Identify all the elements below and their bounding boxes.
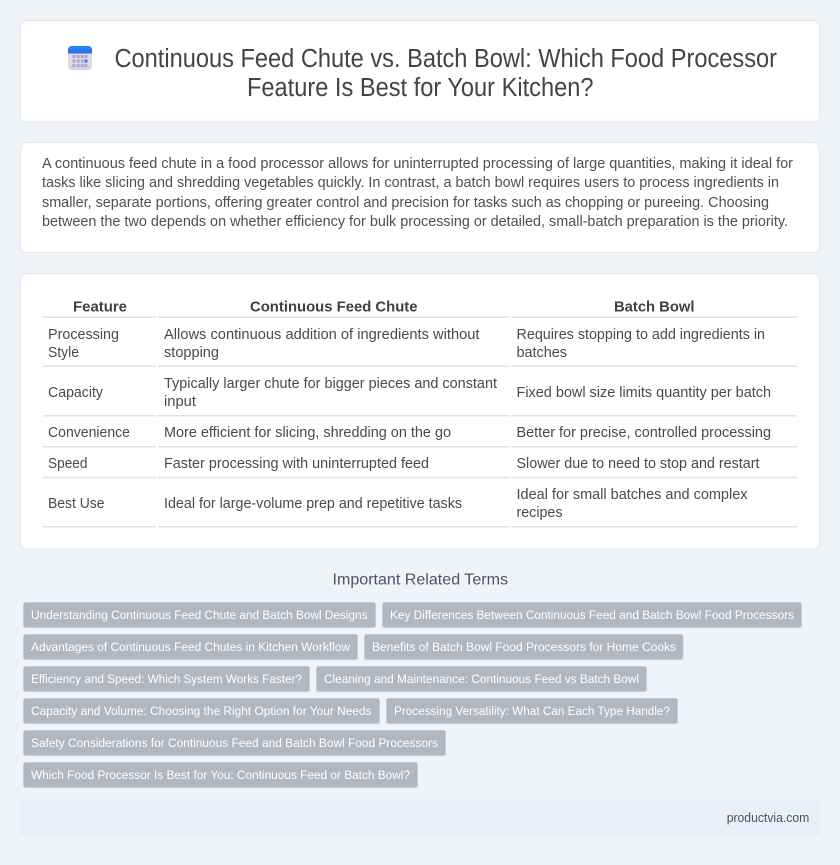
chip: cleaning: Cleaning and Maintenance: Continuous Feed vs Batch Bowl [324, 672, 639, 686]
intro text block: smaller, separate portions, offering greater control and precision for tasks such as chopping or pureeing. Choosing [42, 195, 769, 211]
table row: capacity: Fixed bowl size limits quantity per batch [516, 385, 771, 401]
table row: processing style: Allows continuous addition of ingredients without [164, 327, 480, 343]
table header row: Batch Bowl [614, 300, 694, 316]
chip: benefits: Benefits of Batch Bowl Food Processors for Home Cooks [372, 640, 676, 654]
table row: capacity: Typically larger chute for bigger pieces and constant [164, 376, 497, 392]
table row: capacity [43, 376, 797, 416]
table row: capacity: Capacity [48, 385, 104, 401]
footer bar: productvia.com [727, 811, 809, 825]
table row: processing style: stopping [164, 345, 219, 361]
table row: best use: Best Use [48, 496, 104, 512]
table row: speed: Slower due to need to stop and restart [516, 456, 760, 472]
chip: versatility: Processing Versatility: What Can Each Type Handle? [394, 704, 670, 718]
chip: key differences [382, 602, 802, 628]
chip: efficiency: Efficiency and Speed: Which System Works Faster? [31, 672, 302, 686]
table row: speed: Faster processing with uninterrupted feed [164, 456, 429, 472]
panel: title card [20, 20, 820, 122]
table row: processing style [43, 327, 797, 367]
table header row: Feature [73, 300, 127, 316]
table row: processing style: batches [516, 345, 567, 361]
table row: best use: recipes [516, 505, 562, 521]
chip: benefits [364, 634, 683, 660]
table row: best use: Ideal for large-volume prep and repetitive tasks [164, 496, 462, 512]
related terms chips [24, 602, 802, 788]
title [114, 45, 777, 102]
chip: which is best: Which Food Processor Is Best for You: Continuous Feed or Batch Bowl? [31, 768, 410, 782]
panel: intro paragraph card [20, 142, 820, 252]
chip: efficiency [24, 666, 310, 692]
chip: which is best [24, 762, 418, 788]
panel: comparison table card [20, 274, 820, 549]
chip: versatility [386, 698, 678, 724]
chip: capacity [24, 698, 380, 724]
icon: calendar [68, 46, 92, 70]
chip: safety [24, 730, 446, 756]
intro text block [42, 156, 793, 230]
footer bar [20, 801, 820, 835]
chip: capacity: Capacity and Volume: Choosing the Right Option for Your Needs [31, 704, 372, 718]
table row: convenience: More efficient for slicing, shredding on the go [164, 425, 451, 441]
table row: speed: Speed [48, 456, 88, 472]
table row: best use [43, 487, 797, 528]
table row: speed [43, 456, 797, 478]
table row: convenience: Better for precise, controlled processing [516, 425, 771, 441]
intro text block: tasks like slicing and shredding vegetables quickly. In contrast, a batch bowl requires users to process ingredients in [42, 175, 779, 191]
table row: convenience: Convenience [48, 425, 130, 441]
chip: advantages: Advantages of Continuous Feed Chutes in Kitchen Workflow [31, 640, 350, 654]
table row: convenience [43, 425, 797, 448]
chip: cleaning [316, 666, 646, 692]
table row: processing style: Requires stopping to add ingredients in [516, 327, 765, 343]
title: Feature Is Best for Your Kitchen? [247, 74, 594, 102]
intro text block: between the two depends on whether efficiency for bulk processing or detailed, small-batch preparation is the priority. [42, 214, 788, 230]
table row: processing style: Style [48, 345, 79, 361]
chip: safety: Safety Considerations for Continuous Feed and Batch Bowl Food Processors [31, 736, 438, 750]
chip: designs [24, 602, 376, 628]
table row: best use: Ideal for small batches and complex [516, 487, 748, 503]
chip: designs: Understanding Continuous Feed Chute and Batch Bowl Designs [31, 608, 368, 622]
table row: processing style: Processing [48, 327, 119, 343]
title: Continuous Feed Chute vs. Batch Bowl: Which Food Processor [114, 45, 777, 73]
table row: capacity: input [164, 394, 196, 410]
table header row: Continuous Feed Chute [250, 300, 418, 316]
chip: key differences: Key Differences Between Continuous Feed and Batch Bowl Food Processors [390, 608, 794, 622]
chip: advantages [24, 634, 358, 660]
intro text block: A continuous feed chute in a food processor allows for uninterrupted processing of large quantities, making it ideal for [42, 156, 793, 172]
table header row [43, 300, 797, 318]
heading: important related terms: Important Related Terms [332, 572, 508, 588]
